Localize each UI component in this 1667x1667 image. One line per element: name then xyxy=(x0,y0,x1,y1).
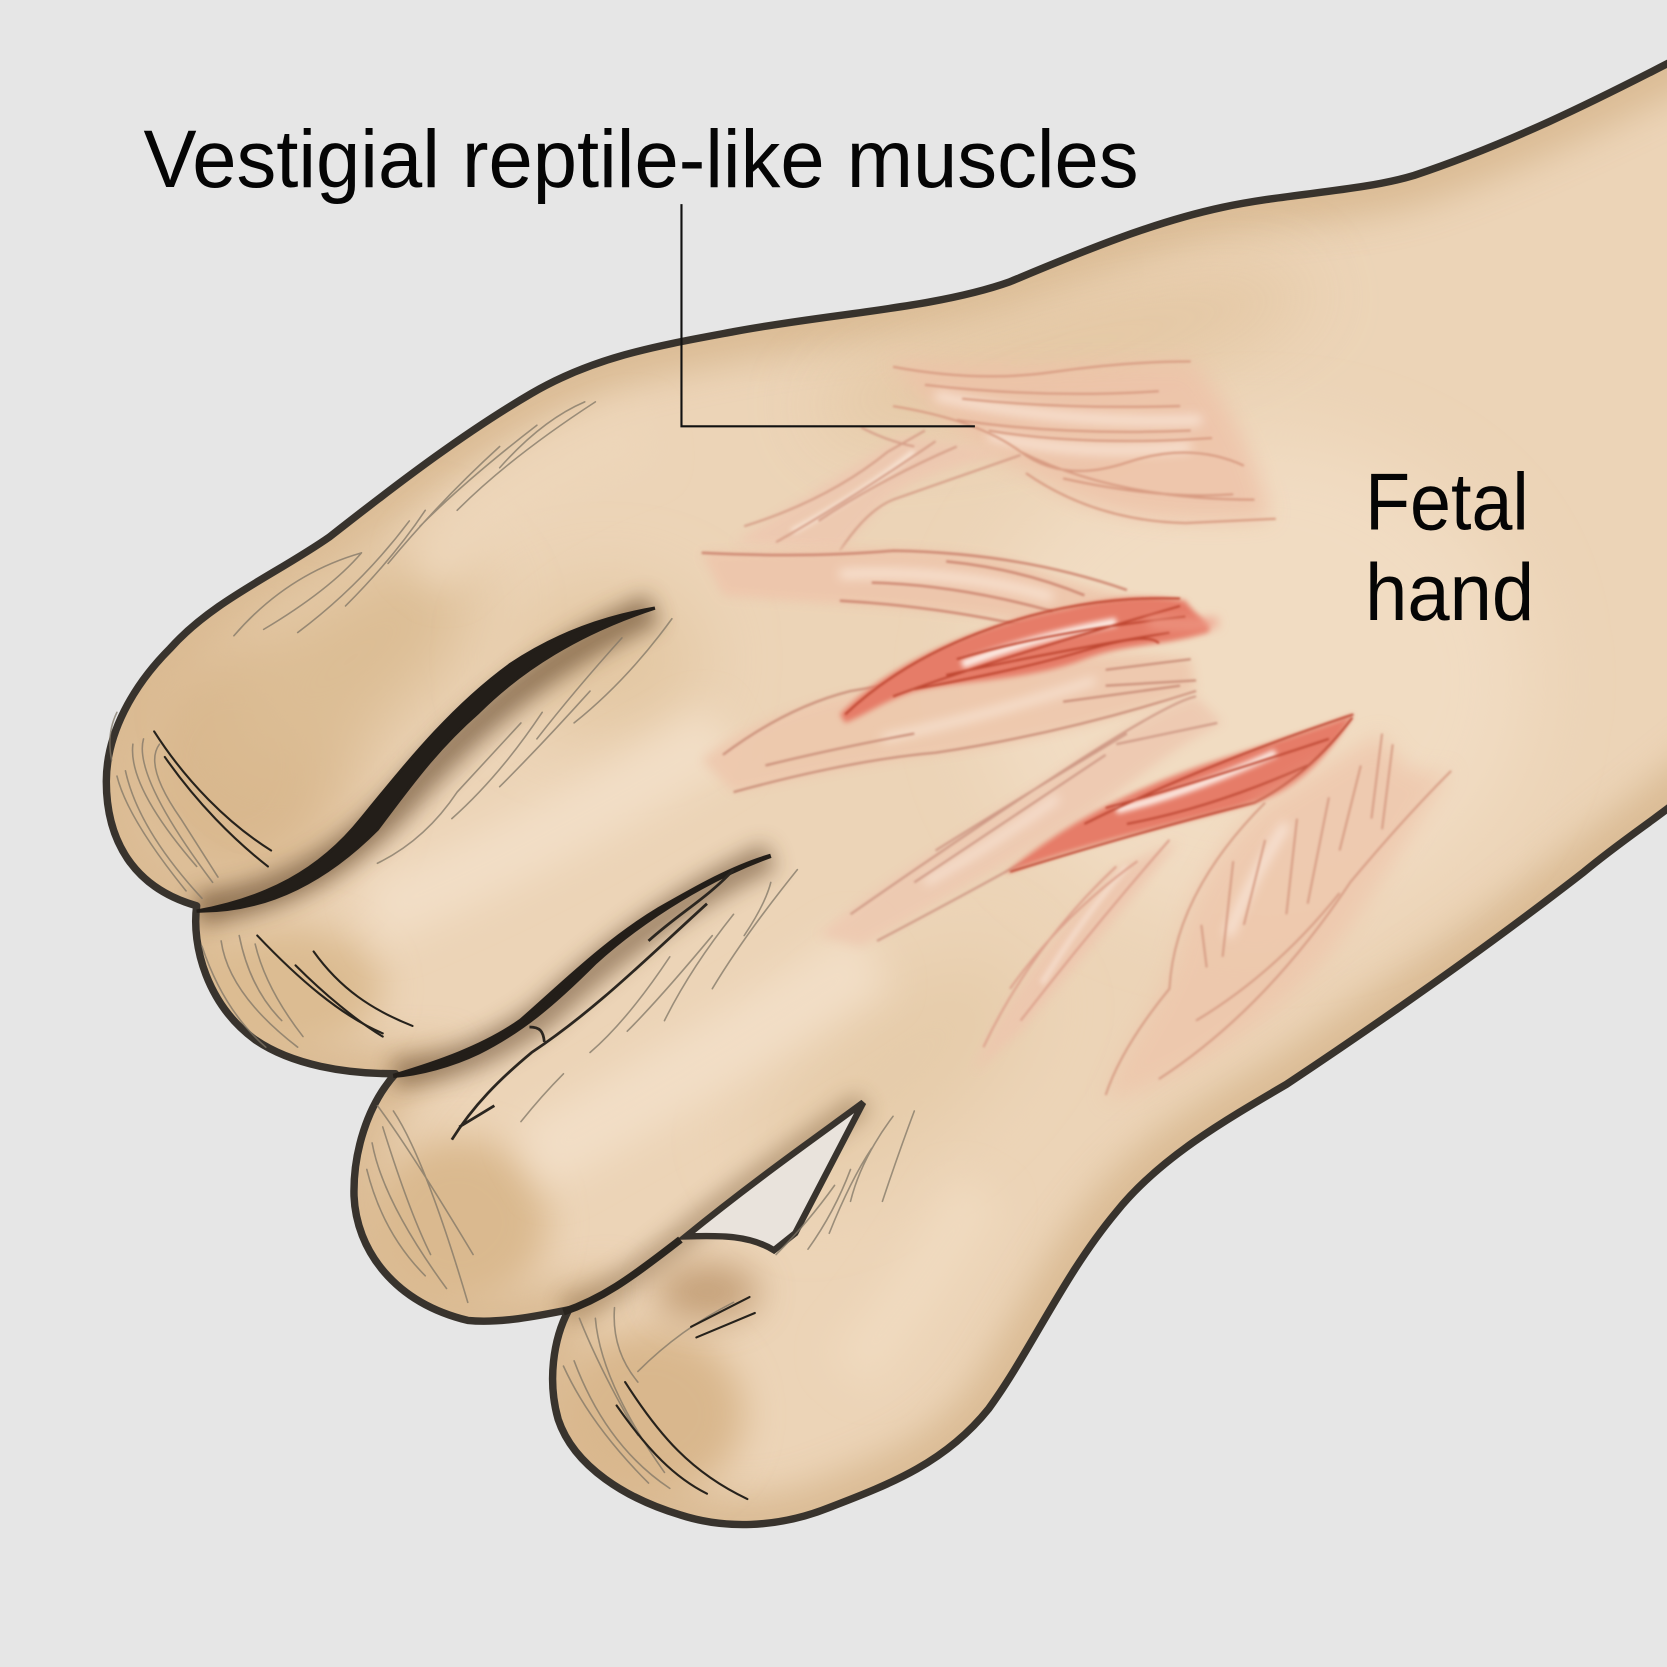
muscle: slim lower diagonal xyxy=(973,840,1180,1074)
finger crease 1 xyxy=(197,608,655,911)
finger crease 2 inner line xyxy=(452,870,734,1140)
label: fetal hand: hand xyxy=(1365,548,1534,638)
finger crease 3 xyxy=(563,1240,680,1312)
fingertip lines: second finger xyxy=(202,936,303,1047)
knuckle wrinkles: second finger xyxy=(377,619,672,863)
muscle: fan-shaped lower right xyxy=(1106,734,1451,1100)
muscle: upper band xyxy=(888,359,1276,523)
muscle: bright red lower belly xyxy=(1005,714,1353,874)
leader line xyxy=(681,204,975,426)
finger crease 2 xyxy=(393,856,771,1076)
knuckle wrinkles: fourth finger xyxy=(776,1111,914,1255)
muscle: bright red upper belly xyxy=(840,597,1217,723)
label: fetal hand: Fetal xyxy=(1365,457,1529,547)
label: vestigial reptile-like muscles: Vestigial reptile-like muscles xyxy=(144,114,1139,205)
fingertip lines: third finger xyxy=(367,1106,473,1302)
fingertip lines: first finger xyxy=(110,712,218,898)
knuckle wrinkles: top finger xyxy=(234,402,595,636)
muscle: long middle band xyxy=(702,548,1169,627)
muscle: lower wide band xyxy=(702,655,1196,792)
muscles xyxy=(702,359,1451,1100)
fingertip lines: fourth finger xyxy=(563,1302,734,1488)
fingertip dark creases xyxy=(154,731,755,1499)
gap between fingers xyxy=(686,1102,863,1250)
muscle: long pale diagonal xyxy=(819,696,1223,946)
fine skin lines xyxy=(110,402,914,1488)
muscle: upper diagonal xyxy=(734,427,1021,551)
knuckle wrinkles: third finger xyxy=(521,870,797,1122)
